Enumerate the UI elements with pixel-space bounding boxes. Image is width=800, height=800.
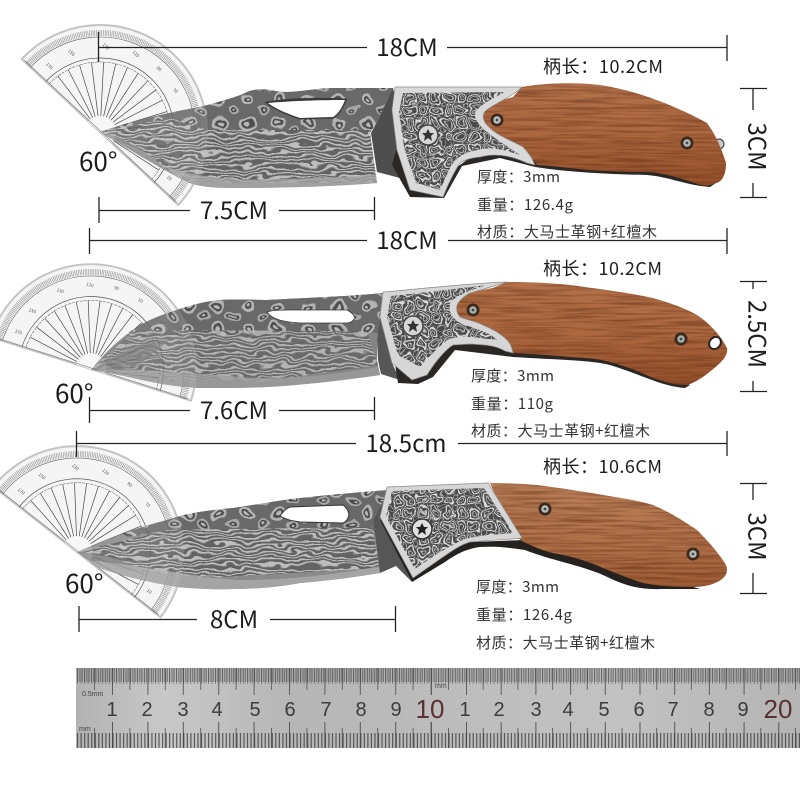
pin 3b: [686, 548, 700, 560]
bolster 2: [380, 282, 513, 380]
dimension: blade length 7.6CM: 7.6CM: [200, 391, 268, 426]
pin 1a: [490, 114, 504, 126]
bolster 1: [392, 85, 535, 197]
protractor: knife 1: [22, 0, 251, 205]
ruler numbers: 3: [177, 699, 189, 721]
steel ruler: [76, 668, 800, 748]
ruler unit labels: mm: [79, 726, 91, 733]
handle length label (knife 2): 柄长：10.2CM: [543, 255, 662, 281]
handle length label (knife 1): 柄长：10.2CM: [543, 53, 663, 79]
dimension: overall length 18CM (knife 2): 18CM: [376, 221, 438, 256]
ruler numbers: 9: [737, 699, 749, 721]
specs (knife 3): 重量：126.4g: [476, 604, 573, 625]
specs (knife 2): 厚度：3mm: [471, 365, 554, 386]
specs (knife 3): [476, 576, 655, 653]
specs (knife 3): 材质：大马士革钢+红檀木: [476, 632, 655, 653]
handle 3: [490, 483, 727, 587]
ruler numbers: 6: [633, 699, 645, 721]
tang 3: [373, 487, 412, 582]
protractor overlay on blades: [0, 0, 251, 617]
dimension: overall length 18.5cm: 18.5cm: [365, 424, 447, 459]
ruler numbers: 7: [667, 699, 679, 721]
specs (knife 1): 材质：大马士革钢+红檀木: [477, 221, 657, 242]
angle label 60 degrees (knife 1): 60°: [79, 142, 117, 179]
ruler numbers: 9: [390, 699, 402, 721]
handle length label (knife 3): 柄长：10.6CM: [543, 453, 662, 479]
knife 3: [70, 483, 727, 595]
ruler numbers: 5: [598, 699, 610, 721]
handle liner 2: [392, 338, 690, 388]
dimension: overall length 18CM (knife 1): 18CM: [376, 28, 438, 63]
dimension: blade length 8CM: [79, 600, 396, 635]
knife 1: [90, 80, 726, 198]
protractor: knife 3: [0, 403, 226, 617]
protractor: knife 2: [0, 237, 223, 401]
dimension: blade length 7.5CM: 7.5CM: [200, 191, 268, 226]
dimension: handle height 3CM (knife 3): [740, 484, 776, 594]
ruler numbers: 1: [459, 699, 471, 721]
ruler unit labels: mm: [435, 683, 447, 690]
bottom fine ticks: [77, 735, 800, 740]
specs (knife 2): 重量：110g: [471, 393, 554, 414]
handle liner 3: [380, 520, 700, 589]
ruler numbers: 2: [141, 699, 153, 721]
ruler numbers: 3: [530, 699, 542, 721]
ruler numbers: 7: [320, 699, 332, 721]
specs (knife 3): 厚度：3mm: [476, 576, 559, 597]
blade 2: [91, 293, 382, 388]
dimension: blade length 7.5CM: [99, 191, 374, 226]
blade 3: [77, 490, 386, 590]
specs (knife 2): [471, 365, 650, 441]
specs (knife 2): 材质：大马士革钢+红檀木: [471, 420, 650, 441]
specs (knife 1): [477, 166, 657, 242]
pin 3a: [538, 502, 552, 516]
dimension: overall length 18CM (knife 2): [89, 221, 727, 256]
specs (knife 1): 重量：126.4g: [477, 194, 574, 215]
handle 1: [483, 83, 726, 185]
pin 1b: [680, 136, 694, 150]
dimension: handle height 3CM (knife 1): [740, 88, 776, 198]
dimension: blade length 8CM: 8CM: [210, 600, 258, 635]
knife 2: [80, 282, 727, 395]
tang 2: [377, 292, 400, 380]
ruler numbers: 6: [284, 699, 296, 721]
dimension: overall length 18CM (knife 1): [98, 28, 727, 63]
pin 2b: [674, 332, 688, 346]
pin 2a: [466, 304, 480, 316]
blade 1: [100, 88, 393, 188]
dimension: handle height 2.5CM (knife 2): 2.5CM: [741, 300, 776, 368]
dimension: handle height 2.5CM (knife 2): [740, 282, 776, 392]
tang 1: [371, 88, 420, 195]
handle 2: [457, 282, 727, 385]
ruler numbers: 5: [249, 699, 261, 721]
ruler unit labels: 0.5mm: [82, 691, 104, 698]
ruler numbers: 10: [416, 694, 444, 724]
dimension: blade length 7.6CM: [90, 391, 374, 426]
ruler numbers: [106, 694, 792, 724]
dimension: overall length 18.5cm: [76, 424, 727, 459]
angle label 60 degrees (knife 3): 60°: [65, 564, 103, 601]
dimension: handle height 3CM (knife 3): 3CM: [741, 512, 776, 561]
ruler numbers: 2: [493, 699, 505, 721]
lanyard hole 2: [707, 334, 723, 352]
bolster 3: [380, 483, 522, 578]
dimension: handle height 3CM (knife 1): 3CM: [741, 122, 776, 171]
specs (knife 1): 厚度：3mm: [477, 166, 560, 187]
ruler numbers: 4: [562, 699, 574, 721]
top fine ticks: [77, 675, 800, 682]
ruler numbers: 8: [355, 699, 367, 721]
ruler unit labels: [79, 683, 447, 733]
ruler numbers: 20: [764, 694, 792, 724]
ruler numbers: 4: [211, 699, 223, 721]
ruler numbers: 1: [106, 699, 118, 721]
handle liner 1: [392, 150, 716, 198]
angle label 60 degrees (knife 2): 60°: [55, 374, 93, 411]
lanyard nub 1: [714, 139, 724, 149]
ruler numbers: 8: [703, 699, 715, 721]
